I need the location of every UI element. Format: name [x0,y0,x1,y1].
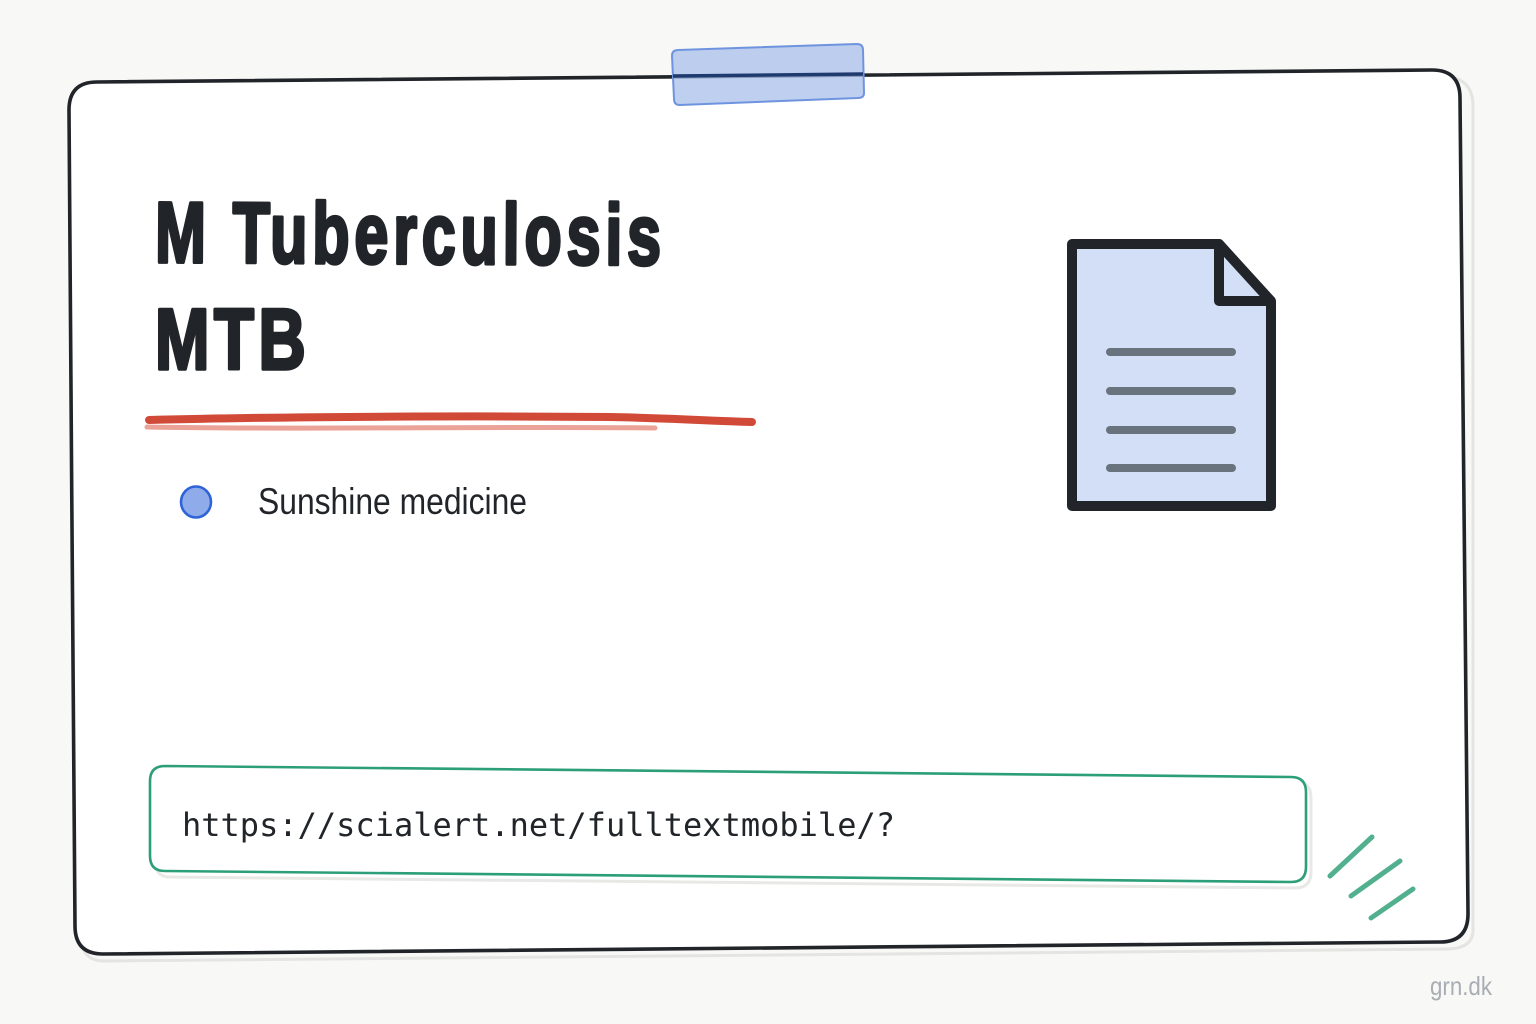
panel: main card [69,70,1468,954]
title [155,184,666,388]
title: M Tuberculosis [155,184,666,283]
title: MTB [155,292,310,388]
url box shadow [155,772,1311,888]
decorative green marks [1330,837,1413,918]
watermark: grn.dk [1430,971,1493,1001]
bullet text: Sunshine medicine [258,481,527,522]
url text: https://scialert.net/fulltextmobile/? [182,806,895,844]
tape [672,44,864,105]
title underline [147,416,752,428]
card shadow [75,76,1473,961]
bullet dot [181,486,211,518]
url box [150,766,1306,882]
icon: document [1072,244,1271,506]
